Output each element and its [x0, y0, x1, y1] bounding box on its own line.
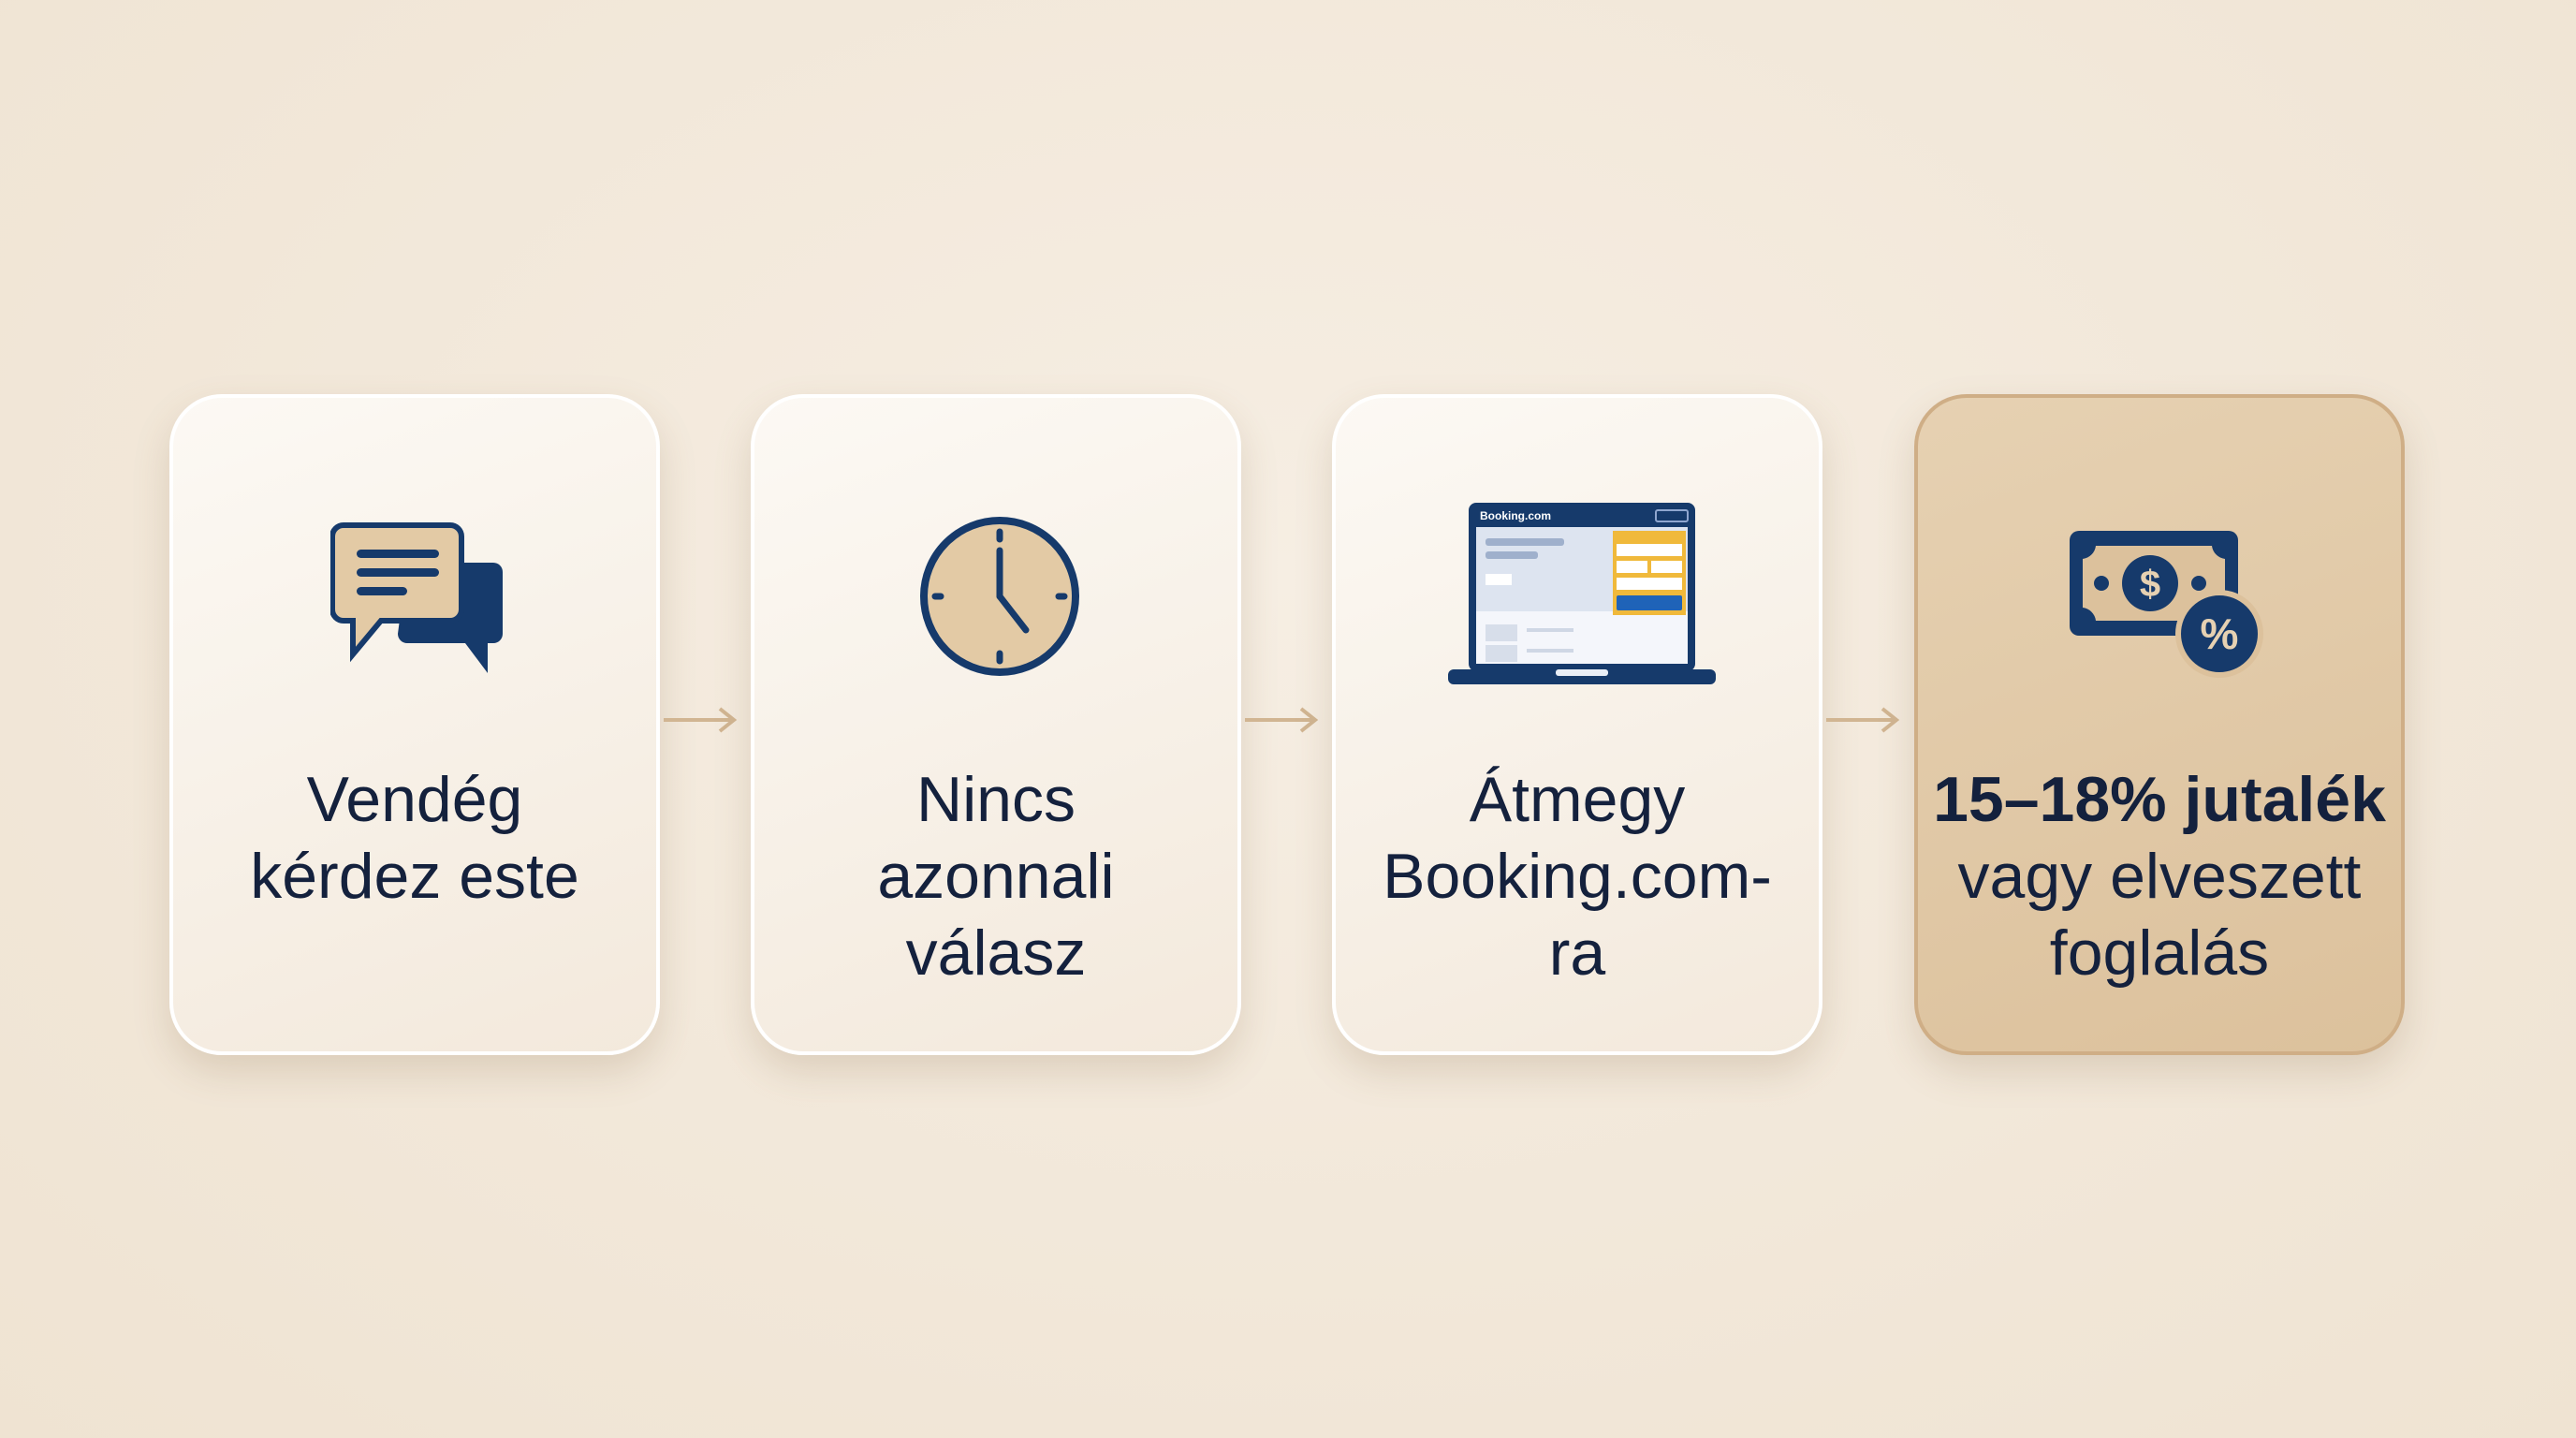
icon: clock — [920, 517, 1079, 676]
arrow 1 — [664, 708, 737, 732]
text: card 3: Booking.com- — [1383, 841, 1772, 912]
card 2: no instant answer — [751, 394, 1241, 1055]
icon: chat bubbles — [330, 522, 503, 673]
text: card 4: foglalás — [2050, 917, 2269, 989]
card 4: commission or lost booking — [1914, 394, 2405, 1055]
text: card 2: azonnali — [877, 841, 1115, 912]
icon: money with percent: % — [2201, 609, 2238, 658]
card 3: goes to Booking.com — [1332, 394, 1822, 1055]
icon: money with percent — [2070, 531, 2263, 678]
text: card 3: ra — [1549, 917, 1605, 989]
icon: laptop with booking page — [1448, 503, 1716, 684]
text: card 4: vagy elveszett — [1958, 841, 2361, 912]
card 1: guest asks — [169, 394, 660, 1055]
text: card 2: Nincs — [916, 764, 1076, 835]
text: card 3: Átmegy — [1470, 764, 1685, 835]
text: card 2: válasz — [906, 917, 1086, 989]
text: card 2 — [877, 764, 1115, 989]
text: card 3 — [1383, 764, 1772, 989]
icon: money with percent: $ — [2140, 564, 2160, 605]
text: card 4 — [1933, 764, 2386, 989]
arrow 3 — [1826, 708, 1899, 732]
text: card 1: kérdez este — [250, 841, 579, 912]
arrow 2 — [1245, 708, 1318, 732]
text: card 1 — [250, 764, 579, 912]
text: card 4: 15–18% jutalék — [1933, 764, 2386, 835]
text: card 1: Vendég — [307, 764, 522, 835]
icon: laptop with booking page: Booking.com — [1480, 509, 1551, 522]
